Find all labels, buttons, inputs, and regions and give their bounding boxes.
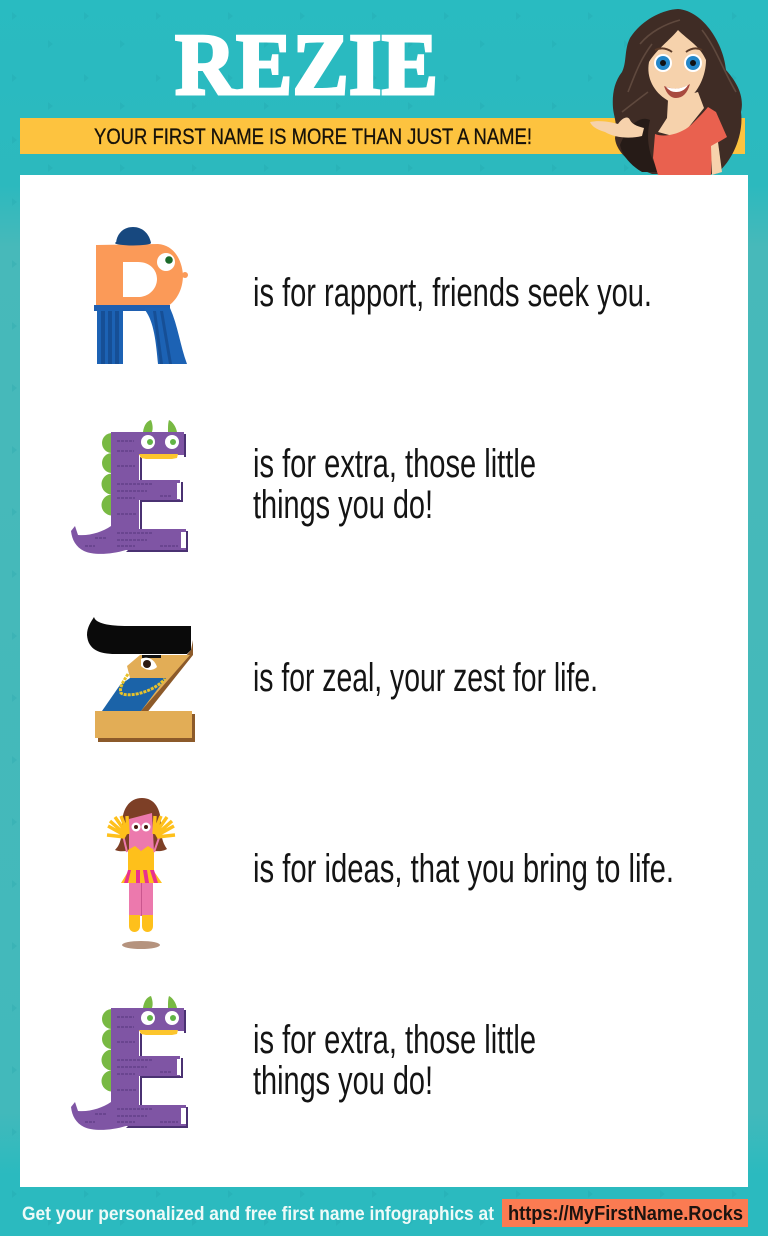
row 1: letter R: [94, 227, 652, 364]
footer call to action: [22, 1199, 748, 1227]
white content panel: [20, 175, 748, 1187]
text: E line: is for extra, those little: [253, 442, 536, 486]
icon: letter Z character: [87, 617, 195, 742]
icon: letter E monster: [71, 420, 188, 554]
row 3: letter Z: [87, 617, 598, 742]
subtitle banner: [20, 118, 745, 154]
title: REZIE: [175, 17, 438, 114]
icon: letter R character: [94, 227, 188, 364]
footer url badge: https://MyFirstName.Rocks: [508, 1203, 743, 1225]
row 5: letter E: [71, 996, 536, 1130]
text: second E line: things you do!: [253, 1059, 433, 1103]
row 4: letter I: [107, 798, 674, 949]
icon: letter E monster repeat: [71, 996, 188, 1130]
subtitle banner: YOUR FIRST NAME IS MORE THAN JUST A NAME!: [94, 124, 532, 149]
text: second E line: is for extra, those little: [253, 1018, 536, 1062]
illustration: woman presenting: [590, 9, 742, 175]
icon: letter I cheerleader: [107, 798, 175, 949]
row 2: letter E: [71, 420, 536, 554]
text: E line: things you do!: [253, 483, 433, 527]
text: Z line: is for zeal, your zest for life.: [253, 656, 598, 700]
footer text: Get your personalized and free first name infographics at: [22, 1204, 495, 1225]
